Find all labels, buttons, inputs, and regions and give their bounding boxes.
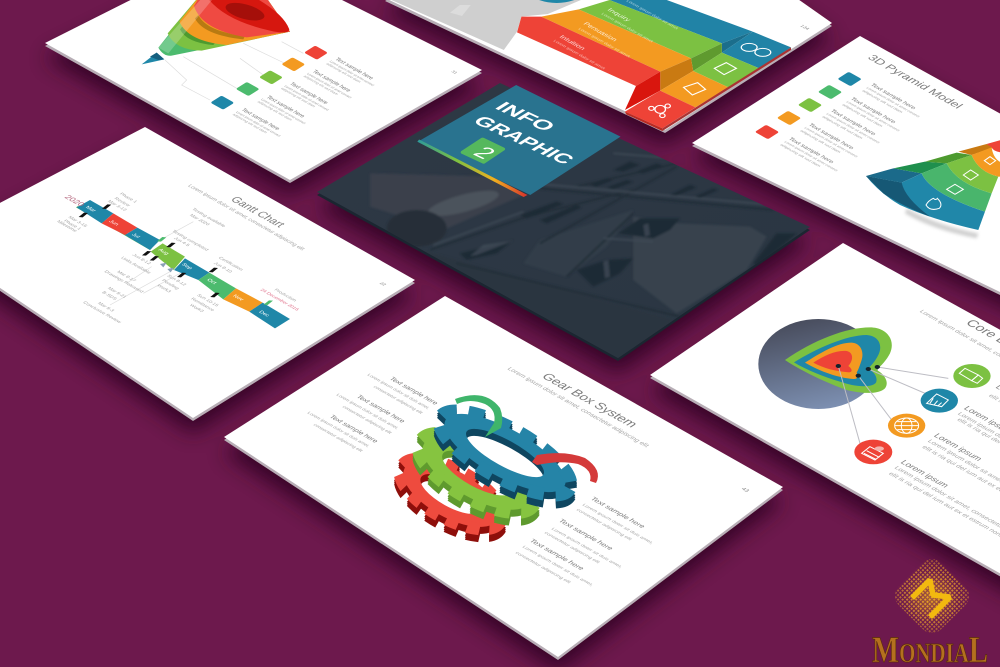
funnel labels: adipiscing elit sed diam (280, 87, 316, 108)
heading: 3D Pyramid Model (865, 53, 965, 110)
funnel labels: adipiscing elit sed diam (232, 113, 268, 134)
Gantt milestone labels: Milestone (55, 220, 79, 233)
Gantt milestone labels: Jun 4-5 (172, 236, 191, 248)
green gear (407, 418, 547, 535)
funnel labels: Lorem ipsum dolor sit amet consect (260, 98, 307, 125)
Gantt milestone labels: Work3 (155, 284, 173, 294)
right text blocks (513, 496, 655, 587)
icon tiles (755, 72, 862, 139)
left text blocks: consectetur adipiscing elit (340, 405, 394, 435)
logo glow (904, 571, 960, 623)
Gantt bar: Nov (231, 294, 245, 302)
icon: document (714, 63, 736, 75)
right text blocks: Lorem ipsum dolor sit duis amet, (580, 503, 655, 545)
pyramid text blocks: Lorem ipsum dolor sit amet consect (845, 100, 901, 132)
arrow: green curved (455, 395, 502, 437)
Gantt milestone labels: B-SDS (100, 291, 118, 301)
band labels: Lorem ipsum dolor sit amet (600, 12, 655, 43)
pyramid text blocks: Text sample here (806, 122, 856, 151)
icon: bank (921, 389, 958, 413)
pyramid icons (926, 157, 996, 209)
Gantt bar: Oct (205, 278, 218, 286)
panel: core diagram slide (650, 243, 1000, 633)
Gantt milestone labels: Phase 1 (62, 219, 83, 231)
left text blocks: Text sample here (327, 414, 380, 444)
panel: Gantt chart slide (0, 127, 415, 421)
left text blocks: Text sample here (354, 394, 407, 424)
Gantt bar: Aug (156, 248, 170, 256)
Gantt milestone labels: Production (272, 288, 298, 303)
core text blocks: Lorem ipsum (932, 432, 985, 462)
connector dots (836, 364, 880, 378)
right text blocks: consectetur adipiscing elit (542, 531, 602, 565)
funnel labels: Text sample here (310, 69, 353, 93)
subheading: Lorem ipsum dolor sit amet, consectetur adipiscing elit (505, 366, 650, 448)
Gantt milestone labels: 24 December 2016 (258, 288, 300, 312)
pyramid text blocks: adipiscing elit sed diam (799, 129, 842, 154)
cover photo: building at dusk (370, 153, 795, 316)
halftone diamond (895, 559, 969, 633)
funnel labels: adipiscing elit sed diam (325, 62, 362, 83)
grey panel highlight (450, 5, 471, 16)
icon tiles (210, 46, 328, 110)
left text blocks: Lorem ipsum dolor sit duis amet, (334, 393, 400, 430)
core text blocks (887, 383, 1000, 546)
funnel labels: 31 (450, 70, 459, 75)
Gantt milestone labels: Mar 3-16 (66, 215, 89, 228)
Gantt milestone labels: Testing available (190, 207, 227, 229)
Gantt milestone labels: Mar 3-13 (106, 199, 128, 212)
panel: funnel slide (45, 0, 482, 183)
connector lines (838, 366, 948, 443)
Gantt milestone labels: Conclusive Review (81, 301, 123, 325)
pyramid text blocks: adipiscing elit sed diam (841, 103, 884, 128)
Gantt milestone labels: Phase 1 (118, 192, 139, 204)
heading: Gear Box System (539, 371, 641, 429)
icon: funnel chart (142, 0, 290, 64)
funnel labels: Text sample here (264, 95, 307, 119)
Gantt milestone labels: Sun 8-12 (165, 274, 188, 287)
funnel labels: Text sample here (239, 107, 282, 132)
pyramid text blocks: Text sample here (828, 108, 878, 137)
watermark: Mondial logo (872, 554, 988, 667)
panel: gear box slide (224, 296, 783, 660)
cover number: 2 (468, 143, 501, 162)
funnel labels: Lorem ipsum dolor sit amet consect (235, 111, 282, 138)
Gantt milestone labels: Mar 8-3 (96, 301, 116, 313)
pyramid text blocks: Text sample here (786, 136, 836, 165)
pyramid text blocks: Lorem ipsum dolor sit amet consect (825, 112, 881, 144)
Gantt bar (76, 200, 290, 328)
coloured bands (517, 0, 791, 131)
band labels: Intuition (557, 34, 587, 51)
right text blocks: Text sample here (556, 518, 615, 551)
core text blocks: Lorem ipsum (898, 459, 951, 489)
funnel labels (232, 57, 459, 138)
Gantt bar: Sep (180, 263, 193, 271)
pyramid text blocks: Lorem ipsum dolor sit amet consect (865, 86, 921, 118)
Gantt milestone labels: Mar 8-17 (115, 270, 138, 283)
icon: megaphone (684, 83, 706, 95)
pyramid text blocks: adipiscing elit sed diam (779, 143, 822, 168)
right text blocks: consectetur adipiscing elit (574, 508, 634, 542)
number tile (463, 139, 503, 162)
Gantt bar: Mar (84, 205, 97, 213)
red gear (389, 445, 513, 550)
pyramid text blocks: Lorem ipsum dolor sit amet consect (783, 140, 839, 172)
band labels: Inquiry (605, 7, 633, 23)
funnel labels: Lorem ipsum dolor sit amet consect (306, 72, 353, 99)
Gantt milestone labels: 22 (378, 281, 388, 287)
grey panel (391, 0, 581, 50)
icon: glasses (741, 43, 771, 56)
Gantt milestone labels: Drawings Released (102, 270, 145, 294)
Gantt milestone labels: Jun 8-12 (130, 253, 152, 266)
Gantt bar: Jul (130, 233, 141, 239)
pyramid text blocks: Lorem ipsum dolor sit amet consect (803, 126, 859, 158)
Gantt milestone labels: Review (112, 197, 132, 208)
icon: truck (953, 364, 991, 388)
funnel labels: Text sample here (288, 81, 330, 106)
band labels: 134 (798, 24, 811, 31)
left text blocks: Lorem ipsum dolor sit duis amet, (305, 411, 371, 448)
pyramid text blocks (779, 82, 921, 172)
Gantt milestone labels: Testing completed (170, 229, 210, 252)
right text blocks: Text sample here (588, 496, 647, 529)
Gantt bar: Dec (257, 310, 271, 318)
blue gear (428, 395, 582, 518)
icon: globe (888, 414, 925, 438)
left text blocks: Text sample here (387, 376, 440, 406)
pyramid text blocks: adipiscing elit sed diam (861, 89, 904, 114)
left text blocks: consectetur adipiscing elit (371, 385, 425, 415)
Gantt subtitle: Lorem ipsum dolor sit amet, consectetur adipiscing elit (186, 184, 306, 252)
left text blocks: Lorem ipsum dolor sit duis amet, (365, 373, 431, 410)
left text blocks: consectetur adipiscing elit (311, 423, 365, 453)
Gantt milestone labels: Units Available (119, 256, 153, 275)
pyramid text blocks: adipiscing elit sed diam (821, 115, 864, 140)
panel: 3D pyramid slide (692, 36, 1000, 353)
Gantt milestone labels: Remittance (189, 297, 216, 313)
panel: top centre slide with folded bands (385, 0, 832, 133)
page number: 43 (739, 487, 750, 493)
right text blocks: Lorem ipsum dolor sit duis amet, (549, 527, 624, 569)
funnel labels: adipiscing elit sed diam (257, 100, 293, 121)
Gantt milestone labels: Mar 8-21 (106, 286, 128, 299)
cover teal block (418, 85, 621, 195)
funnel labels: adipiscing elit sed diam (303, 75, 339, 96)
funnel labels: Text sample here (333, 57, 375, 81)
heart chart (758, 319, 892, 409)
Gantt milestone labels (55, 192, 388, 325)
Gantt milestone labels: Certification (217, 256, 245, 272)
arrow: red curved (532, 453, 598, 483)
band labels (552, 0, 811, 70)
left text blocks (305, 373, 440, 453)
right text blocks: Text sample here (527, 538, 586, 571)
logo fragment (539, 0, 574, 3)
panel: cover slide (317, 83, 810, 363)
Gantt title: Gantt Chart (228, 194, 289, 230)
milestone markers (79, 204, 273, 305)
Gantt milestone labels: Work3 (188, 303, 205, 314)
3D pyramid chart (866, 139, 1000, 238)
colour stripe (418, 140, 527, 197)
right text blocks: consectetur adipiscing elit (513, 551, 573, 585)
logo mark (912, 580, 950, 617)
icon: network (649, 104, 670, 118)
band labels: Persuasion (581, 21, 619, 43)
Gantt milestone labels: Jun 8-10 (212, 261, 234, 274)
band labels: Lorem ipsum dolor sit amet (577, 27, 632, 58)
Gantt year: 2020 (62, 194, 87, 208)
Gantt bar: Jun (107, 219, 120, 227)
cover subtitle word: GRAPHIC (468, 113, 579, 167)
funnel labels: Lorem ipsum dolor sit amet consect (283, 85, 331, 112)
funnel labels: Lorem ipsum dolor sit amet consect (329, 60, 376, 87)
right text blocks: Lorem ipsum dolor sit duis amet, (520, 545, 595, 587)
pyramid text blocks: Text sample here (868, 82, 918, 111)
icon: document and cloud (854, 440, 892, 464)
Gantt milestone labels: Pending (160, 279, 181, 291)
pyramid text blocks: Text sample here (848, 96, 898, 125)
Gantt milestone labels: Sun 10-15 (195, 293, 220, 308)
cover title: INFO (490, 99, 560, 135)
band labels: Lorem ipsum dolor sit amet (552, 39, 607, 70)
Gantt milestone labels: Mar 2020 (188, 213, 211, 227)
